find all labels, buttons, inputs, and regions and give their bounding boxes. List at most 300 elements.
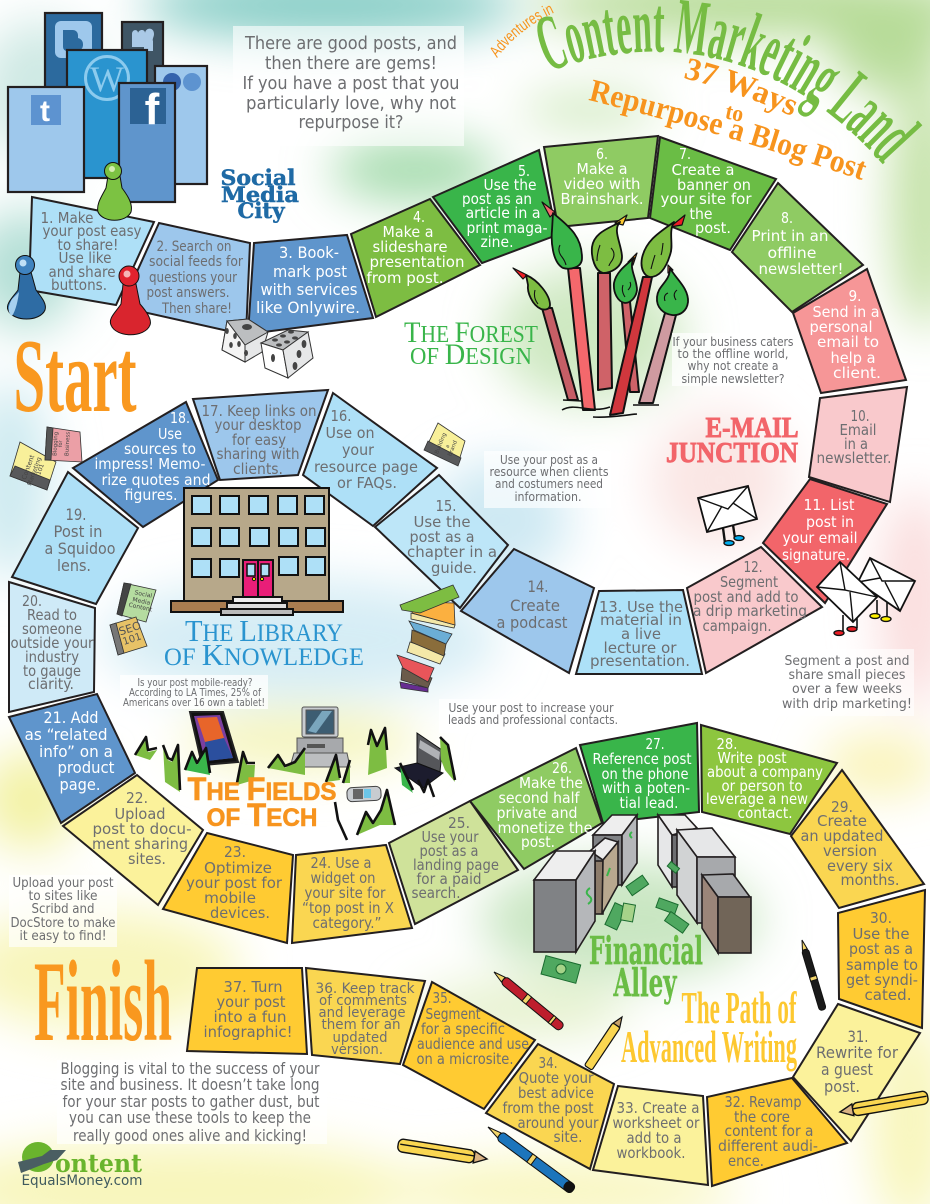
tile 35: Segment — [426, 1005, 481, 1023]
icon: red pawn — [110, 266, 150, 335]
tile 30: get syndi- — [846, 971, 918, 989]
tile 32: 32. Revamp — [724, 1093, 802, 1111]
icon: red pen — [491, 969, 565, 1031]
icon: pencil right — [839, 1091, 929, 1118]
tile 21: as “related — [24, 725, 108, 744]
icon: book SEO 101: SEO — [117, 619, 143, 638]
icon: mobile phone — [347, 786, 381, 802]
tile 5: zine. — [480, 233, 514, 251]
tile 1: and share — [48, 263, 116, 281]
callout: offline newsletter: simple newsletter? — [682, 372, 784, 386]
tile 34: Quote your — [518, 1069, 594, 1087]
icon: pencil bottom — [397, 1139, 488, 1165]
callout: drip marketing: over a few weeks — [792, 682, 902, 697]
tile 17: for easy — [232, 431, 286, 449]
tile 34: from the post — [502, 1099, 594, 1117]
tile 15: 15. — [436, 497, 456, 515]
tile 27: Reference post — [592, 750, 692, 768]
heading: Financial Alley — [589, 928, 703, 1005]
icon: books top left — [10, 427, 82, 490]
subtitle: Repurpose a Blog Post: Repurpose a Blog Post — [588, 80, 866, 180]
tile 2: social feeds for — [149, 254, 243, 270]
heading: The Library of Knowledge: THE LIBRARY — [185, 613, 343, 648]
callout: upload — [9, 875, 117, 947]
heading: E-mail Junction: JUNCTION — [666, 437, 798, 469]
callout: intro: particularly love, why not — [246, 93, 456, 114]
callout: offline newsletter: to the offline world, — [678, 347, 788, 361]
callout: leads: leads and professional contacts. — [448, 713, 618, 727]
tile 16: your — [342, 441, 375, 459]
tile 32 — [707, 1078, 847, 1186]
tile 2: post answers. — [146, 285, 230, 301]
tile 12: campaign. — [702, 617, 772, 635]
tile 34: best advice — [518, 1084, 594, 1102]
tile 27 — [580, 723, 699, 823]
tile 37: infographic! — [204, 1023, 292, 1041]
tile 10: in a — [844, 435, 868, 453]
tile 30: 30. — [870, 909, 892, 927]
tile 13: 13. Use the — [599, 598, 683, 616]
callout: resource: Use your post as a — [500, 453, 598, 467]
tile 12: Segment — [720, 573, 778, 591]
tile 11: 11. List — [804, 496, 855, 514]
tile 32: the core — [734, 1108, 790, 1126]
icon: stack of books — [397, 585, 459, 692]
heading: Social Media City — [220, 165, 299, 223]
tile 1: your post easy — [42, 222, 142, 240]
tile 7: banner on — [677, 176, 751, 194]
tile 24: widget on — [310, 869, 376, 887]
tile 8: 8. — [781, 209, 793, 227]
tile 25: post as a — [420, 842, 478, 860]
heading: Financial Alley: Financial — [589, 928, 703, 973]
heading: The Forest of Design: THE FOREST — [404, 316, 538, 349]
tile 21: info” on a — [39, 742, 113, 761]
callout: mobile-ready — [120, 675, 268, 709]
icon: social media cards: W — [90, 59, 124, 99]
callout: leads — [439, 699, 622, 733]
tile 5: article in a — [466, 204, 540, 222]
tile 18: figures. — [124, 486, 178, 504]
tile 4: slideshare — [372, 238, 448, 256]
tile 31: 31. — [848, 1027, 868, 1046]
icon: blue pawn — [7, 256, 45, 319]
heading: The Forest of Design: OF DESIGN — [410, 338, 532, 371]
callout: drip marketing: Segment a post and — [784, 654, 910, 669]
tile 9: personal — [810, 318, 872, 336]
callout: offline newsletter: why not create a — [688, 359, 778, 373]
tile 35: 35. — [432, 989, 452, 1007]
tile 6: 6. — [596, 145, 608, 163]
tile 6 — [544, 136, 658, 227]
tile 16 — [303, 393, 437, 526]
icon: books top left: Blogging — [52, 432, 60, 456]
callout: drip marketing: with drip marketing! — [782, 697, 912, 712]
tile 27: 27. — [646, 735, 664, 753]
illustration: tech field with tablet, computer, laptop and grass — [135, 707, 455, 840]
tile 33: add to a — [626, 1129, 682, 1147]
tile 4 — [351, 199, 480, 317]
icon: books top left: Marketing — [26, 456, 43, 487]
tile 20: to gauge — [23, 662, 81, 680]
tile 11 — [763, 479, 887, 603]
tile 36: and leverage — [318, 1005, 406, 1021]
tile 34: site. — [554, 1128, 582, 1146]
callout: upload: it easy to find! — [20, 929, 106, 944]
heading: Start: Start — [14, 317, 137, 434]
callout: upload: to sites like — [28, 889, 98, 904]
tile 17: your desktop — [214, 416, 302, 434]
heading: Social Media City: Media — [221, 182, 299, 207]
tile 25: 25. — [448, 814, 470, 832]
tile 5: 5. — [518, 162, 530, 180]
tile 9: client. — [833, 364, 881, 382]
tile 36: updated — [332, 1030, 388, 1046]
tile 19: Post in — [54, 522, 102, 541]
tile 21: product — [58, 758, 114, 777]
tile 36: of comments — [319, 993, 407, 1009]
tile 10: newsletter. — [816, 449, 892, 467]
tile 7: post. — [695, 219, 731, 237]
logo: ContentEqualsMoney — [18, 1142, 142, 1189]
callout: drip marketing — [777, 649, 914, 716]
tile 35: audience and use — [417, 1035, 529, 1053]
callout: resource: and costumers need — [495, 477, 603, 491]
tile 25: Use your — [422, 828, 479, 846]
tile 14: 14. — [528, 577, 548, 596]
tile 5: print maga- — [466, 219, 548, 237]
tile 25 — [389, 801, 518, 924]
icon: books top left: Content — [20, 453, 36, 481]
tile 34: 34. — [538, 1054, 558, 1072]
title: Adventures in: Adventures in — [490, 6, 554, 58]
tile 31: post. — [824, 1077, 860, 1096]
tile 18: sources to — [124, 440, 196, 458]
tile 26: private and — [496, 804, 578, 822]
icon: book building a brand: Brand — [447, 440, 459, 457]
tile 35 — [403, 982, 535, 1109]
tile 28: Write post — [718, 749, 787, 767]
tile 32: different audi- — [718, 1137, 818, 1155]
tile 30 — [838, 890, 925, 1028]
tile 26: post. — [521, 833, 555, 851]
tile 30: cated. — [864, 986, 912, 1004]
callout: resource — [484, 451, 611, 508]
tile 7: Create a — [672, 161, 734, 179]
callout: intro — [233, 26, 464, 146]
icon: books top left: Business — [64, 432, 72, 456]
tile 16: 16. — [330, 407, 352, 425]
tile 3: mark post — [273, 262, 347, 281]
illustration: financial district buildings — [534, 815, 751, 953]
tile 6: Make a — [576, 160, 628, 178]
icon: green pawn — [98, 162, 131, 220]
tile 36: version. — [331, 1042, 383, 1058]
tile 20: clarity. — [28, 675, 74, 693]
tile 35: for a specific — [421, 1020, 505, 1038]
tile 28: leverage a new — [706, 790, 808, 808]
icon: book building a brand — [424, 423, 465, 466]
icon: pencil center — [584, 1015, 626, 1070]
tile 25: landing page — [413, 856, 499, 874]
icon: social media cards — [8, 13, 207, 202]
tile 17: sharing with — [216, 445, 300, 463]
tile 25: for a paid — [416, 870, 482, 888]
callout: upload: Scribd and — [32, 902, 94, 917]
tile 28: contact. — [738, 804, 792, 822]
tile 28: 28. — [716, 735, 738, 753]
tile 9 — [793, 269, 906, 393]
tile 15 — [375, 475, 508, 608]
tile 13 — [576, 590, 702, 674]
tile 18: Use — [158, 425, 182, 443]
icon: money bills — [541, 861, 689, 983]
tile 34 — [486, 1044, 614, 1169]
callout: intro: then there are gems! — [265, 53, 437, 74]
icon: book social media content — [117, 583, 156, 622]
tile 26: second half — [498, 789, 580, 807]
icon: envelope walking — [698, 486, 757, 545]
tile 13: presentation. — [590, 652, 690, 670]
tile 19: lens. — [57, 556, 91, 575]
tile 22: post to docu- — [92, 820, 192, 838]
tile 23: 23. — [224, 843, 246, 861]
tile 24: category.” — [312, 914, 382, 932]
tile 29 — [791, 770, 924, 908]
tile 6: video with — [564, 175, 640, 193]
icon: envelopes walking — [817, 558, 915, 635]
icon: books top left: for — [58, 439, 64, 448]
tile 5: post as an — [462, 190, 532, 208]
tile 14: Create — [510, 596, 560, 615]
tile 13: a live — [621, 625, 661, 643]
icon: books top left: 101 — [35, 463, 46, 476]
tile 21: 21. Add — [44, 708, 98, 727]
tile 18: impress! Memo- — [94, 455, 206, 473]
subtitle: 37 Ways: 37 Ways — [684, 58, 796, 115]
tile 21 — [9, 694, 135, 823]
tile 15: chapter in a — [407, 543, 497, 561]
tile 3 — [248, 235, 373, 334]
heading: Financial Alley: Alley — [613, 960, 677, 1005]
tile 20: Read to — [27, 606, 77, 624]
tile 3: 3. Book- — [279, 243, 339, 262]
tile 4: presentation — [370, 253, 464, 271]
text: closing paragraph: for your star posts to gather dust, but — [62, 1092, 320, 1111]
tile 1: 1. Make — [40, 209, 94, 227]
tile 4: from post. — [366, 269, 444, 287]
tile 11: post in — [806, 513, 854, 531]
tile 27: with a poten- — [602, 779, 690, 797]
tile 8: Print in an — [752, 227, 828, 245]
tile 28: about a company — [707, 763, 823, 781]
tile 29: every six — [827, 857, 893, 875]
tile 14 — [461, 549, 594, 673]
tile 19 — [12, 472, 138, 604]
heading: The Forest of Design — [404, 316, 538, 371]
tile 16: Use on — [326, 424, 374, 442]
tile 7: the — [690, 205, 712, 223]
tile 10 — [809, 387, 907, 502]
tile 30: sample to — [846, 956, 918, 974]
heading: Social Media City: Social — [220, 165, 296, 190]
tile 1: Use like — [58, 249, 112, 267]
tile 31: Rewrite for — [816, 1043, 898, 1062]
tile 22: 22. — [126, 789, 148, 807]
heading: The Fields of Tech: OF TECH — [206, 797, 318, 833]
tile 5 — [433, 150, 557, 263]
tile 2 — [121, 223, 250, 335]
icon: dice — [222, 319, 313, 378]
tile 29: an updated — [800, 827, 884, 845]
callout: leads: Use your post to increase your — [448, 701, 614, 715]
icon: book building a brand: a — [445, 444, 451, 449]
tile 10: 10. — [850, 407, 870, 425]
tile 6: Brainshark. — [560, 190, 644, 208]
text: closing paragraph — [57, 1059, 327, 1145]
tile 18: rize quotes and — [102, 471, 210, 489]
heading: The Fields of Tech: THE FIELDS — [188, 771, 336, 807]
tile 2: questions your — [149, 270, 237, 286]
callout: offline newsletter: If your business caters — [672, 335, 794, 349]
tile 2: Then share! — [161, 301, 232, 317]
callout: resource: information. — [514, 490, 582, 504]
tile 15: Use the — [414, 513, 470, 531]
tile 32: ence. — [728, 1152, 764, 1170]
tile 24: 24. Use a — [310, 854, 372, 872]
tile 22: ment sharing — [92, 835, 188, 853]
callout: drip marketing: share small pieces — [788, 668, 906, 683]
tile 29: months. — [840, 871, 900, 889]
tile 11: your email — [782, 529, 858, 547]
tile 12 — [687, 547, 822, 673]
icon: book social media content: Media — [132, 596, 151, 607]
tile 7 — [650, 137, 776, 250]
tile 20: outside your — [10, 634, 94, 652]
tile 19: a Squidoo — [44, 539, 116, 558]
tile 19: 19. — [66, 505, 86, 524]
text: closing paragraph: site and business. It doesn’t take long — [60, 1075, 320, 1094]
tile 12: post and add to — [694, 588, 798, 606]
tile 36: 36. Keep track — [316, 981, 415, 997]
tile 24: your site for — [304, 884, 386, 902]
icon: black pen — [799, 939, 826, 1011]
tile 5: Use the — [484, 176, 536, 194]
icon: blue pen — [485, 1123, 576, 1194]
tile 26: monetize the — [498, 819, 592, 837]
text: closing paragraph: really good ones alive and kicking! — [73, 1126, 307, 1145]
tile 4: Make a — [382, 223, 434, 241]
callout: intro: If you have a post that you — [242, 73, 460, 94]
icon: book social media content: Social — [134, 589, 153, 600]
tile 24: “top post in X — [302, 899, 394, 917]
tile 13: material in — [600, 611, 682, 629]
illustration: library building — [171, 488, 343, 615]
tile 32: content for a — [724, 1122, 814, 1140]
tile 29: version — [823, 842, 877, 860]
tile 28 — [701, 725, 837, 834]
subtitle: to: to — [723, 99, 746, 127]
callout: mobile-ready: Is your post mobile-ready? — [138, 676, 253, 689]
tile 10: Email — [840, 421, 876, 439]
tile 9: email to — [817, 333, 879, 351]
callout: intro: repurpose it? — [298, 112, 404, 133]
tile 18: 18. — [170, 409, 190, 427]
tile 33: worksheet or — [612, 1114, 700, 1132]
tile 23: mobile — [204, 889, 256, 907]
tile 29: Create — [817, 812, 867, 830]
callout: resource: resource when clients — [490, 465, 608, 479]
tile 33 — [593, 1086, 708, 1185]
tile 17: 17. Keep links on — [202, 402, 316, 420]
icon: social media cards: f — [145, 85, 160, 134]
tile 37: into a fun — [214, 1008, 286, 1026]
tile 9: 9. — [848, 287, 862, 305]
tile 27: tial lead. — [620, 794, 678, 812]
tile 16: resource page — [314, 458, 418, 476]
heading: The Library of Knowledge — [164, 613, 364, 672]
tile 7: 7. — [679, 145, 691, 163]
callout: mobile-ready: Americans over 16 own a tablet! — [123, 696, 265, 709]
tile 20 — [9, 582, 95, 712]
heading: The Path of Advanced Writing — [621, 983, 797, 1072]
tile 20: 20. — [22, 592, 42, 610]
tile 16: or FAQs. — [337, 474, 397, 492]
tile 27: on the phone — [602, 765, 688, 783]
tile 8: offline — [768, 244, 816, 262]
icon: social media cards: t — [40, 95, 50, 128]
tile 21: page. — [60, 775, 100, 794]
tile 28: or person to — [722, 777, 802, 795]
tile 9: Send in a — [812, 303, 880, 321]
tile 22 — [63, 775, 203, 905]
callout: upload: DocStore to make — [10, 916, 116, 931]
tile 31: a guest — [821, 1060, 873, 1079]
tile 37: 37. Turn — [224, 978, 282, 996]
tile 30: post as a — [849, 940, 913, 958]
tile 26 — [470, 748, 602, 869]
tile 3: like Onlywire. — [256, 298, 360, 317]
tile 17: clients. — [233, 460, 283, 478]
icon: book social media content: Content — [128, 602, 153, 614]
tile 1: buttons. — [51, 276, 107, 294]
tile 37 — [187, 968, 307, 1054]
heading: Social Media City: City — [238, 198, 285, 223]
heading: The Path of Advanced Writing: The Path of — [682, 983, 797, 1033]
callout: upload: Upload your post — [12, 876, 114, 891]
tile 13: lecture or — [604, 639, 677, 657]
tile 36: them for an — [322, 1017, 400, 1033]
tile 26: Make the — [519, 774, 583, 792]
tile 22: sites. — [128, 850, 166, 868]
callout: mobile-ready: According to LA Times, 25% of — [129, 686, 262, 699]
icon: book SEO 101 — [110, 617, 147, 655]
tile 7: your site for — [660, 190, 752, 208]
tile 15: guide. — [431, 559, 477, 577]
logo: ContentEqualsMoney: ontent — [55, 1149, 142, 1178]
tile 24 — [292, 845, 412, 943]
tile 33: 33. Create a — [616, 1099, 700, 1117]
tile 23: your post for — [186, 874, 283, 892]
icon: book building a brand: Building — [434, 432, 448, 455]
tile 3: with services — [260, 280, 358, 299]
tile 14: a podcast — [496, 613, 568, 632]
tile 17 — [193, 390, 328, 480]
tile 18 — [73, 402, 218, 527]
tile 12: 12. — [744, 558, 762, 576]
tile 33: workbook. — [616, 1144, 686, 1162]
tile 4: 4. — [413, 208, 425, 226]
